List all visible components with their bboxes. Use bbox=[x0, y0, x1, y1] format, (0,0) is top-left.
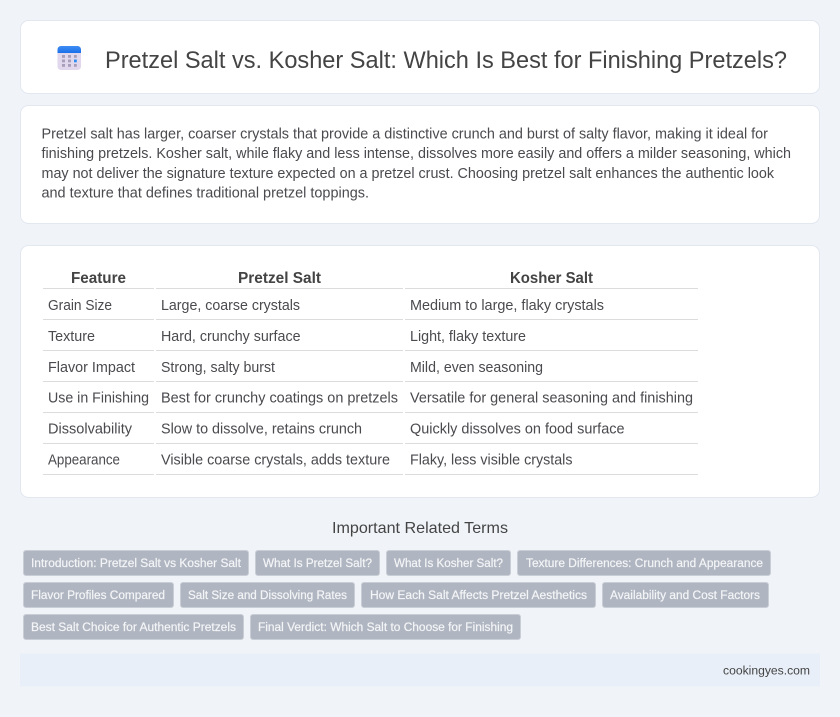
tag: Texture Differences: Crunch and Appearance bbox=[526, 556, 763, 570]
text block: description paragraph: and texture that defines traditional pretzel toppings. bbox=[42, 186, 369, 202]
table header: Feature bbox=[71, 270, 126, 287]
table header: Kosher Salt bbox=[510, 270, 593, 287]
table row: flavor impact: Flavor Impact bbox=[48, 360, 135, 376]
table row: use in finishing: Versatile for general seasoning and finishing bbox=[410, 390, 693, 406]
text block: description paragraph: finishing pretzels. Kosher salt, while flaky and less intense, dissolves more easily and offers a milder seasoning, which bbox=[42, 146, 791, 162]
text block: description paragraph bbox=[42, 126, 791, 202]
table row: dissolvability: Slow to dissolve, retains crunch bbox=[161, 422, 362, 438]
table row: flavor impact bbox=[48, 360, 543, 376]
text block: description paragraph: Pretzel salt has larger, coarser crystals that provide a distinctive crunch and burst of salty flavor, making it ideal for bbox=[42, 126, 768, 142]
tag bbox=[180, 582, 354, 608]
table row: dissolvability bbox=[48, 422, 624, 438]
tag bbox=[250, 614, 520, 640]
table header bbox=[71, 270, 593, 287]
tag: Introduction: Pretzel Salt vs Kosher Salt bbox=[31, 556, 242, 570]
tag: Availability and Cost Factors bbox=[610, 588, 760, 602]
table row: texture: Hard, crunchy surface bbox=[161, 329, 300, 345]
footer text: source: cookingyes.com bbox=[723, 664, 810, 678]
tag: How Each Salt Affects Pretzel Aesthetics bbox=[370, 588, 587, 602]
tag bbox=[362, 582, 596, 608]
table row: texture bbox=[48, 329, 526, 345]
tag: Best Salt Choice for Authentic Pretzels bbox=[31, 620, 236, 634]
table row: use in finishing: Best for crunchy coatings on pretzels bbox=[161, 390, 398, 406]
title: Pretzel Salt vs. Kosher Salt: Which Is Best for Finishing Pretzels? bbox=[105, 47, 787, 74]
table row: use in finishing: Use in Finishing bbox=[48, 390, 149, 406]
tag: Flavor Profiles Compared bbox=[31, 588, 165, 602]
tag: Final Verdict: Which Salt to Choose for Finishing bbox=[258, 620, 513, 634]
table row: appearance: Flaky, less visible crystals bbox=[410, 452, 572, 468]
table row: appearance: Visible coarse crystals, adds texture bbox=[161, 452, 390, 468]
tag bbox=[602, 582, 768, 608]
tag bbox=[24, 550, 248, 576]
heading: important related terms: Important Related Terms bbox=[332, 520, 508, 537]
tag bbox=[386, 550, 510, 576]
table row: dissolvability: Quickly dissolves on food surface bbox=[410, 422, 624, 438]
text block: description paragraph: may not deliver the signature texture expected on a pretzel crust. Choosing pretzel salt enhances the authentic look bbox=[42, 166, 775, 182]
table row: texture: Light, flaky texture bbox=[410, 329, 526, 345]
table row: dissolvability: Dissolvability bbox=[48, 422, 133, 438]
tag bbox=[518, 550, 770, 576]
table row: grain size bbox=[48, 298, 604, 314]
tag bbox=[256, 550, 380, 576]
table row: grain size: Large, coarse crystals bbox=[161, 298, 300, 314]
panel: comparison table bbox=[20, 246, 820, 498]
table row: grain size: Grain Size bbox=[48, 298, 112, 314]
table row: grain size: Medium to large, flaky crystals bbox=[410, 298, 604, 314]
table row: texture: Texture bbox=[48, 329, 95, 345]
panel: description bbox=[20, 106, 820, 224]
panel: title card bbox=[20, 20, 820, 94]
table row: appearance: Appearance bbox=[48, 452, 120, 468]
table row: flavor impact: Mild, even seasoning bbox=[410, 360, 543, 376]
table row: flavor impact: Strong, salty burst bbox=[161, 360, 275, 376]
icon: calendar bbox=[58, 46, 81, 70]
tag: What Is Kosher Salt? bbox=[394, 556, 503, 570]
tags: related terms bbox=[24, 550, 770, 640]
tag bbox=[24, 582, 174, 608]
table row: use in finishing bbox=[48, 390, 693, 406]
tag bbox=[24, 614, 244, 640]
tag: Salt Size and Dissolving Rates bbox=[188, 588, 347, 602]
footer bbox=[20, 654, 820, 686]
tag: What Is Pretzel Salt? bbox=[263, 556, 372, 570]
table header: Pretzel Salt bbox=[238, 270, 321, 287]
table row: appearance bbox=[48, 452, 572, 468]
